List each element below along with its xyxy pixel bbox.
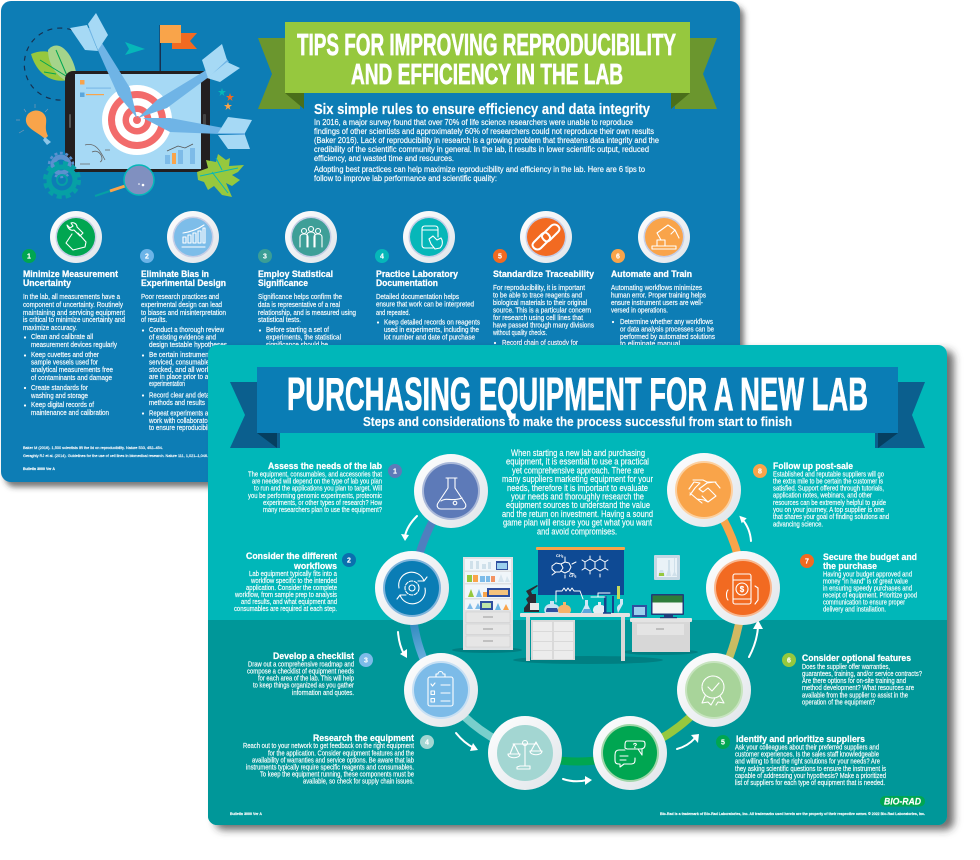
references and bulletin footer: Bulletin 3000 Ver A bbox=[23, 467, 55, 471]
tip 2: eliminate bias: 2 bbox=[145, 254, 149, 260]
intro text block bbox=[314, 102, 659, 183]
heading banner: blue ribbon bbox=[230, 367, 925, 448]
icon: chain link bbox=[532, 224, 560, 250]
tip 1: minimize measurement uncertainty: maintaining and servicing equipment bbox=[23, 308, 125, 317]
step 8: follow up post-sale: that shares your goal of finding solutions and bbox=[773, 512, 889, 521]
intro text block: centre bbox=[502, 448, 653, 536]
intro text block: In 2016, a major survey found that over 70% of life science researchers were unable to reproduce bbox=[314, 118, 633, 127]
tip 1: minimize measurement uncertainty: maximize accuracy. bbox=[23, 323, 77, 332]
tip 4: practice laboratory documentation bbox=[375, 211, 480, 342]
tip 3: employ statistical significance: 3 bbox=[263, 254, 267, 260]
step 1: assess the needs: 1 bbox=[393, 468, 397, 476]
step 1: assess the needs bbox=[248, 454, 488, 528]
step 3: develop a checklist: information and quotes. bbox=[292, 688, 354, 697]
tip 6: automate and train: to eliminate manual bbox=[620, 339, 680, 348]
intro text block: centre: equipment sources to understand the value bbox=[506, 500, 650, 510]
tip 2: eliminate bias: design testable hypotheses bbox=[149, 340, 227, 349]
tip 1: minimize measurement uncertainty: sample vessels used for bbox=[31, 358, 99, 366]
tip 2: eliminate bias: Poor research practices and bbox=[141, 292, 219, 301]
logo: Bio-Rad: BIO-RAD bbox=[884, 796, 921, 808]
subtitle: Steps and considerations to make the process successful from start to finish bbox=[363, 415, 792, 429]
step 4: research the equipment: for the application. Consider equipment features and the bbox=[268, 748, 414, 758]
icon: balance scales bbox=[508, 740, 542, 769]
icon: award rosette bbox=[702, 676, 724, 705]
panel: tips poster (back) bbox=[1, 1, 740, 482]
tip 6: automate and train: human error. Proper training helps bbox=[611, 290, 706, 300]
step 1: assess the needs: experiments, or other types of research? How bbox=[263, 498, 383, 507]
step 5: identify suppliers: Identify and prioritize suppliers bbox=[736, 734, 865, 745]
step 5: identify suppliers: list of suppliers for each type of equipment that is needed. bbox=[735, 778, 885, 787]
tip 2: eliminate bias: experimentation bbox=[149, 379, 185, 388]
step 7: secure the budget: communication to ensure proper bbox=[823, 598, 905, 606]
icon: bar chart bbox=[182, 225, 205, 247]
intro text block: Six simple rules to ensure efficiency and data integrity bbox=[314, 102, 650, 118]
title: tips: TIPS FOR IMPROVING REPRODUCIBILITY bbox=[297, 27, 676, 62]
step 8: follow up post-sale: advancing science. bbox=[773, 520, 823, 528]
step 8: follow up post-sale: satisfied. Support offered through tutorials, bbox=[773, 484, 884, 492]
tip 4: practice laboratory documentation: Practice Laboratory bbox=[376, 269, 458, 279]
heading banner: green ribbon: AND EFFICIENCY IN THE LAB bbox=[351, 59, 623, 91]
step 2: consider workflows: Lab equipment typically fits into a bbox=[249, 569, 337, 578]
tip 2: eliminate bias: methods and results bbox=[149, 398, 205, 407]
step 5: identify suppliers bbox=[593, 716, 886, 790]
step 3: develop a checklist: to keep things organized as you gather bbox=[253, 680, 354, 690]
tip 5: standardize traceability: have passed through many divisions bbox=[493, 320, 594, 330]
step 5: identify suppliers: 5 bbox=[721, 740, 725, 746]
step 5: identify suppliers: ? bbox=[633, 743, 637, 750]
tip 2: eliminate bias: Record clear and detailed bbox=[149, 390, 219, 400]
heading banner: green ribbon bbox=[258, 22, 717, 109]
lower dark band bbox=[208, 620, 947, 825]
tip 1: minimize measurement uncertainty: measurement devices regularly bbox=[31, 340, 117, 349]
step 7: secure the budget: money "in hand" is of great value bbox=[823, 576, 908, 586]
icon: gear with cycle arrows bbox=[397, 572, 427, 604]
intro text block: efficiency, and wasted time and resources. bbox=[314, 154, 454, 163]
references and bulletin footer bbox=[23, 446, 208, 471]
step 6: optional features: method development? What resources are bbox=[802, 683, 914, 692]
step 2: consider workflows: consumables are required at each step. bbox=[234, 604, 337, 613]
intro text block: (Baker 2016). Lack of reproducibility in research is a growing problem that threatens data integrity and the bbox=[314, 136, 659, 145]
icon: wrench in hand bbox=[66, 223, 86, 250]
step 2: consider workflows: Consider the different bbox=[246, 551, 338, 562]
tip 1: minimize measurement uncertainty: maintenance and calibration bbox=[31, 408, 109, 417]
step 2: consider workflows: workflows bbox=[293, 561, 337, 572]
step 6: optional features bbox=[677, 653, 922, 727]
tip 3: employ statistical significance: Employ Statistical bbox=[258, 269, 333, 279]
step 7: secure the budget: $ bbox=[740, 585, 745, 594]
intro text block: centre: your needs and thoroughly research the bbox=[511, 492, 644, 502]
step 1: assess the needs: Assess the needs of the lab bbox=[268, 461, 382, 472]
intro text block: Adopting best practices can help maximize reproducibility and efficiency in the lab. Here are 6 tips to bbox=[314, 165, 646, 174]
step 2: consider workflows bbox=[234, 551, 449, 625]
tip 1: minimize measurement uncertainty: of contaminants and damage bbox=[31, 373, 112, 382]
intro text block: centre: game plan will ensure you get what you want bbox=[503, 518, 652, 528]
tip 1: minimize measurement uncertainty: washing and storage bbox=[30, 391, 88, 400]
icon: clipboard bbox=[428, 672, 453, 706]
tip 5: standardize traceability: without quality checks. bbox=[492, 328, 547, 337]
panel: purchasing poster (front) bbox=[208, 345, 947, 825]
tip 5: standardize traceability: For reproducibility, it is important bbox=[493, 283, 585, 292]
tip 2: eliminate bias: are in place prior to any bbox=[149, 372, 215, 381]
step 7: secure the budget: receipt of equipment. Prioritize good bbox=[823, 590, 917, 600]
wall chart icon bbox=[654, 555, 680, 580]
tip 2: eliminate bias: of existing evidence and bbox=[149, 332, 216, 342]
step 3: develop a checklist: for each area of the lab. This will help bbox=[258, 674, 354, 682]
tip 6: automate and train: ensure instrument users are well- bbox=[611, 298, 704, 307]
tip 1: minimize measurement uncertainty: Minimize Measurement bbox=[23, 269, 118, 279]
references and bulletin footer: Baker M (2016). 1,500 scientists lift the lid on reproducibility. Nature 533, 452–454. bbox=[23, 446, 163, 450]
tip 2: eliminate bias bbox=[140, 211, 227, 432]
tip 6: automate and train: Automating workflows minimizes bbox=[611, 283, 702, 292]
tip 3: employ statistical significance: data is representative of a real bbox=[258, 300, 340, 309]
icon: handshake bbox=[689, 480, 720, 503]
step 3: develop a checklist: 3 bbox=[364, 658, 368, 664]
footer legal text: Bio-Rad is a trademark of Bio-Rad Laboratories, Inc. All trademarks used herein are the property of their respective owner. © 2022 Bio-Rad Laboratories, Inc. bbox=[660, 812, 925, 816]
side cabinet with computer bbox=[630, 594, 692, 652]
tip 2: eliminate bias: to biases and misinterpretation bbox=[141, 308, 226, 317]
process ring: connecting arcs bbox=[412, 490, 743, 762]
tip 2: eliminate bias: Repeat experiments and bbox=[149, 408, 215, 418]
tip 4: practice laboratory documentation: lot number and date of purchase bbox=[384, 332, 475, 342]
tip 4: practice laboratory documentation: used in experiments, including the bbox=[384, 325, 479, 334]
microscope bbox=[524, 585, 539, 612]
step 8: follow up post-sale: 8 bbox=[758, 468, 762, 476]
intro text block: centre: equipment, it is essential to use a practical bbox=[506, 457, 649, 467]
tip 5: standardize traceability: Standardize Traceability bbox=[493, 269, 594, 279]
tip 5: standardize traceability: source. This is a particular concern bbox=[493, 306, 591, 314]
intro text block: follow to improve lab performance and scientific quality: bbox=[314, 174, 497, 183]
tip 2: eliminate bias: experimental design can lead bbox=[141, 300, 222, 309]
tip 2: eliminate bias: Be certain instruments are bbox=[149, 350, 225, 359]
footer legal text: Bulletin 3000 Ver A bbox=[230, 812, 262, 816]
step 3: develop a checklist bbox=[247, 651, 478, 727]
tip 4: practice laboratory documentation: Documentation bbox=[376, 278, 438, 288]
intro text block: centre: yet comprehensive approach. There are bbox=[512, 465, 644, 475]
references and bulletin footer: Geraghty RJ et al. (2014). Guidelines for the use of cell lines in biomedical research. Nature 111, 1,021–1,046. bbox=[23, 454, 208, 458]
footer legal text bbox=[230, 812, 925, 816]
tip 3: employ statistical significance: Before starting a set of bbox=[266, 325, 329, 334]
tip 3: employ statistical significance: Significance helps confirm the bbox=[258, 292, 342, 301]
tip 5: standardize traceability: biological materials to their original bbox=[493, 298, 587, 307]
icon: tablet and hand bbox=[422, 226, 442, 249]
tip 1: minimize measurement uncertainty: Keep digital records of bbox=[31, 400, 94, 409]
tip 1: minimize measurement uncertainty: In the lab, all measurements have a bbox=[23, 292, 120, 301]
tip 6: automate and train: Automate and Train bbox=[611, 269, 692, 279]
step 7: secure the budget: Having your budget approved and bbox=[823, 570, 912, 578]
tip 2: eliminate bias: stocked, and all workflows bbox=[149, 365, 225, 374]
step 5: identify suppliers: they asking scientific questions to ensure the instrument is bbox=[735, 764, 886, 773]
tip 1: minimize measurement uncertainty: 1 bbox=[27, 254, 31, 260]
step 3: develop a checklist: compose a checklist of equipment needs bbox=[247, 666, 354, 676]
step 4: research the equipment: Research the equipment bbox=[313, 733, 415, 744]
tip 1: minimize measurement uncertainty: Keep cuvettes and other bbox=[31, 350, 100, 359]
intro text block: centre: needs, therefore it is important to evaluate bbox=[507, 483, 648, 493]
tip 2: eliminate bias: Eliminate Bias in bbox=[141, 269, 209, 279]
step 4: research the equipment: 4 bbox=[425, 740, 429, 746]
tip 4: practice laboratory documentation: Detailed documentation helps bbox=[376, 292, 459, 301]
step 7: secure the budget: the purchase bbox=[823, 561, 877, 572]
step 1: assess the needs: many researchers plan to use the equipment? bbox=[263, 505, 382, 514]
step 2: consider workflows: workflow specific to the intended bbox=[250, 576, 337, 585]
tip 5: standardize traceability: 5 bbox=[498, 254, 502, 260]
tip 2: eliminate bias: Experimental Design bbox=[141, 278, 226, 288]
storage shelf bbox=[463, 557, 513, 650]
step 8: follow up post-sale: application notes, webinars, and other bbox=[773, 490, 872, 500]
tip 2: eliminate bias: to ensure reproducibility bbox=[149, 423, 215, 432]
step 8: follow up post-sale: you on your journey. A top supplier is one bbox=[773, 505, 884, 514]
step 6: optional features: available from the supplier to assist in the bbox=[802, 690, 908, 700]
tip 3: employ statistical significance: statistical tests. bbox=[258, 315, 301, 324]
intro text block: centre: and avoid compromises. bbox=[537, 526, 617, 536]
step 1: assess the needs: to run and the applications you plan to target. Will bbox=[254, 484, 382, 492]
tip 1: minimize measurement uncertainty bbox=[22, 211, 125, 417]
step 6: optional features: Consider optional features bbox=[802, 653, 911, 664]
step 5: identify suppliers: capable of addressing your hypothesis? Make a prioritized bbox=[735, 771, 886, 780]
tip 1: minimize measurement uncertainty: Clean and calibrate all bbox=[31, 332, 93, 341]
tip 3: employ statistical significance: experiments, the statistical bbox=[266, 332, 341, 342]
step 2: consider workflows: 2 bbox=[347, 558, 351, 564]
tip 4: practice laboratory documentation: and repeated. bbox=[376, 308, 410, 317]
step 4: research the equipment: instruments typically require specific reagents and consumables. bbox=[246, 762, 414, 772]
step 7: secure the budget bbox=[706, 551, 917, 625]
flow arrows bbox=[398, 516, 763, 785]
tip 6: automate and train: performed by automated solutions bbox=[620, 332, 715, 341]
tip 4: practice laboratory documentation: 4 bbox=[380, 254, 384, 260]
tip 3: employ statistical significance bbox=[258, 211, 356, 349]
chalkboard with molecules bbox=[536, 547, 625, 595]
tip 5: standardize traceability: for research using cell lines that bbox=[493, 313, 583, 322]
step 4: research the equipment: Reach out to your network to get feedback on the right equipment bbox=[243, 741, 414, 750]
tip 6: automate and train: or data analysis processes can be bbox=[620, 324, 714, 334]
step 2: consider workflows: and results, and what equipment and bbox=[241, 597, 337, 606]
tip 1: minimize measurement uncertainty: Uncertainty bbox=[23, 278, 71, 288]
step 4: research the equipment: available, so check for supply chain issues. bbox=[303, 776, 414, 786]
tip 1: minimize measurement uncertainty: analytical measurements free bbox=[31, 365, 113, 374]
icon: phone with dollar bbox=[726, 574, 758, 604]
step 4: research the equipment bbox=[243, 716, 562, 790]
intro text block: credibility of the scientific community in general. In the lab, it results in lower scientific output, reduced bbox=[314, 145, 649, 154]
step 7: secure the budget: delivery and installation. bbox=[823, 604, 886, 614]
step 7: secure the budget: Secure the budget and bbox=[823, 552, 917, 563]
step 6: optional features: guarantees, training, and/or service contracts? bbox=[802, 669, 922, 678]
tip 1: minimize measurement uncertainty: Create standards for bbox=[31, 383, 89, 392]
step 1: assess the needs: you be performing genomic experiments, proteomic bbox=[248, 491, 382, 500]
tip 5: standardize traceability: to be able to trace reagents and bbox=[493, 290, 582, 300]
tip 6: automate and train bbox=[611, 211, 715, 348]
step 8: follow up post-sale: the extra mile to be certain the customer is bbox=[773, 476, 883, 486]
step 6: optional features: Does the supplier offer warranties, bbox=[802, 662, 890, 671]
step 3: develop a checklist: Develop a checklist bbox=[273, 651, 355, 662]
tip 5: standardize traceability bbox=[492, 211, 594, 347]
lab table with glassware bbox=[520, 585, 647, 661]
tip 2: eliminate bias: work with collaborators bbox=[148, 416, 213, 425]
tip 3: employ statistical significance: significance should be bbox=[266, 340, 328, 349]
step 4: research the equipment: To keep the equipment running, these components must be bbox=[260, 770, 414, 778]
step 4: research the equipment: availability of warranties and service options. Be aware that lab bbox=[252, 756, 414, 764]
step 5: identify suppliers: customer experiences. Is the sales staff knowledgeable bbox=[735, 750, 879, 758]
step 2: consider workflows: workflow, from sample prep to analysis bbox=[234, 590, 337, 599]
step 6: optional features: Are there options for on-site training and bbox=[802, 676, 906, 685]
icon: group of people bbox=[300, 226, 322, 247]
step 8: follow up post-sale: Established and reputable suppliers will go bbox=[773, 470, 884, 478]
tip 2: eliminate bias: Conduct a thorough review bbox=[149, 325, 225, 334]
step 7: secure the budget: 7 bbox=[805, 558, 809, 566]
chalkboard with molecules: CH₃ bbox=[569, 573, 577, 578]
step 5: identify suppliers: Ask your colleagues about their preferred suppliers and bbox=[735, 742, 879, 752]
tip 1: minimize measurement uncertainty: component of uncertainty. Routinely bbox=[23, 300, 123, 309]
tip 4: practice laboratory documentation: Keep detailed records on reagents bbox=[384, 318, 480, 326]
tip 6: automate and train: versed in operations. bbox=[611, 306, 668, 314]
step 8: follow up post-sale: resources can be extremely helpful to guide bbox=[773, 498, 886, 507]
tip 2: eliminate bias: of results. bbox=[141, 315, 167, 324]
step 3: develop a checklist: Draw out a comprehensive roadmap and bbox=[248, 660, 354, 668]
step 6: optional features: 6 bbox=[787, 658, 791, 664]
tip 3: employ statistical significance: relationship, and is measured using bbox=[258, 308, 356, 317]
intro text block: centre: many suppliers marketing equipment for your bbox=[502, 474, 653, 484]
intro text block: centre: When starting a new lab and purchasing bbox=[511, 448, 645, 458]
step 8: follow up post-sale: Follow up post-sale bbox=[773, 461, 853, 472]
tip 4: practice laboratory documentation: ensure that work can be interpreted bbox=[376, 300, 474, 308]
icon: flask bbox=[437, 478, 466, 509]
icon: speech bubbles bbox=[615, 741, 645, 767]
illustration: laboratory bench bbox=[452, 547, 698, 664]
step 5: identify suppliers: and willing to find the right solutions for your needs? Are bbox=[735, 756, 880, 766]
step 1: assess the needs: The equipment, consumables, and accessories that bbox=[248, 470, 382, 478]
tip 3: employ statistical significance: Significance bbox=[258, 278, 308, 288]
tip 6: automate and train: Determine whether any workflows bbox=[620, 317, 713, 326]
intro text block: centre: and the return on investment. Having a sound bbox=[502, 509, 653, 519]
chalkboard with molecules: CH₃ bbox=[556, 553, 564, 558]
step 2: consider workflows: application. Consider the complete bbox=[246, 583, 337, 592]
icon: robot arm bbox=[652, 225, 679, 249]
tip 2: eliminate bias: serviced, consumables are bbox=[149, 358, 223, 366]
step 1: assess the needs: are needed will depend on the type of lab you plan bbox=[252, 476, 382, 486]
tip 5: standardize traceability: Record chain of custody for bbox=[502, 338, 579, 347]
step 7: secure the budget: in ensuring speedy purchases and bbox=[823, 584, 912, 592]
tip 6: automate and train: 6 bbox=[616, 254, 620, 260]
illustration: tablet with target and darts bbox=[16, 13, 252, 197]
tip 1: minimize measurement uncertainty: is critical to minimize uncertainty and bbox=[23, 315, 125, 324]
intro text block: findings of other scientists and approximately 60% of researchers could not reproduce their own results bbox=[314, 127, 654, 136]
step 6: optional features: operation of the equipment? bbox=[802, 698, 875, 706]
step 8: follow up post-sale bbox=[667, 453, 889, 528]
